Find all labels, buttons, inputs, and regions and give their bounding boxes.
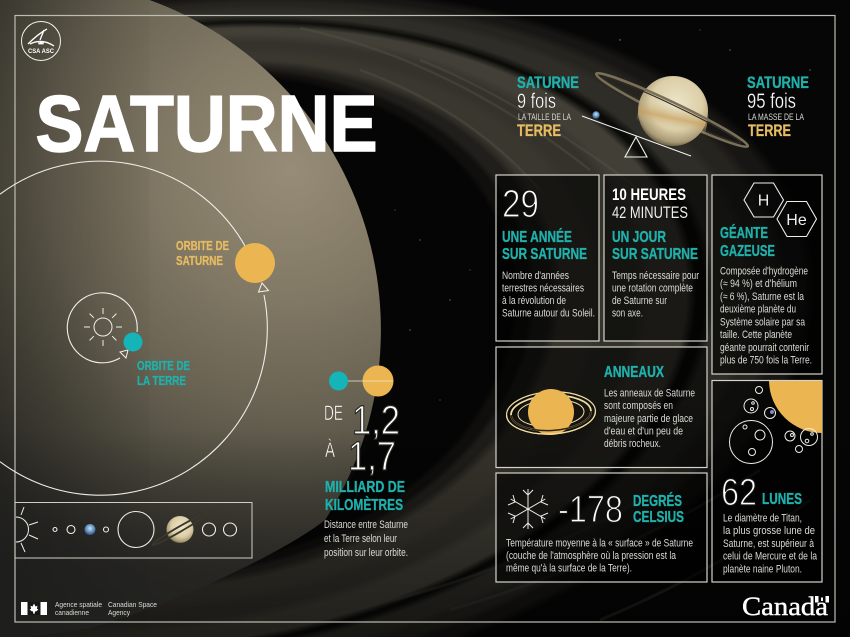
- panel: one year on Saturn: Nombre d'années: [502, 270, 569, 282]
- panel: moons: celui de Mercure et de la: [723, 550, 818, 562]
- panel: gas giant: (≈ 6 %), Saturne est la: [720, 291, 805, 303]
- icon: hydrogen hexagon: H: [758, 192, 769, 210]
- diagram: Saturn orbit: SATURNE: [176, 254, 223, 268]
- diagram: Earth orbit and Sun: [67, 293, 190, 388]
- text: mass comparison: TERRE: [748, 121, 791, 140]
- icon: Saturn quarter disc: [769, 381, 822, 433]
- icon: hydrogen hexagon: [744, 183, 784, 217]
- text: size comparison: LA TAILLE DE LA: [518, 112, 571, 122]
- panel: one day on Saturn: 10 HEURES: [612, 185, 686, 204]
- panel: one year on Saturn: SUR SATURNE: [502, 246, 587, 263]
- background: stars: [394, 30, 811, 400]
- distance between Saturn and Earth: Distance entre Saturne: [324, 519, 408, 531]
- icon: snowflake: [508, 489, 548, 529]
- panel: one year on Saturn: terrestres nécessaires: [502, 282, 584, 294]
- diagram: Saturn orbit: ORBITE DE: [176, 239, 229, 253]
- panel: gas giant: Composée d'hydrogène: [720, 266, 808, 278]
- icon: balance beam: [582, 111, 691, 157]
- icon: helium hexagon: He: [786, 212, 807, 229]
- footer: Canadian Space Agency signature: Agence spatiale: [55, 600, 102, 609]
- balance comparison: Saturn versus Earth: [517, 67, 809, 157]
- logo: Canadian Space Agency: [22, 22, 60, 60]
- icon: moons: [730, 386, 818, 464]
- diagram: Earth orbit and Sun: ORBITE DE: [137, 359, 190, 373]
- panel: temperature: même qu'à la surface de la Terre).: [506, 562, 632, 574]
- distance between Saturn and Earth: 1,2: [352, 397, 400, 443]
- title: SATURNE: [36, 79, 378, 168]
- panel: rings: d'eau et d'un peu de: [604, 426, 683, 438]
- panel: temperature: [496, 473, 707, 582]
- panel: moons: 62: [721, 472, 757, 514]
- footer: Canadian Space Agency signature: canadienne: [55, 608, 89, 617]
- panel: temperature: DEGRÉS: [633, 491, 682, 510]
- background: Saturn planet: [0, 0, 381, 637]
- panel: moons: Le diamètre de Titan,: [723, 512, 802, 524]
- panel: gas giant: GÉANTE: [720, 223, 768, 242]
- panel: one day on Saturn: de Saturne sur: [612, 295, 667, 307]
- panel: gas giant: plus de 750 fois la Terre.: [720, 354, 812, 366]
- panel: moons: planète naine Pluton.: [723, 564, 802, 576]
- footer: Canadian Space Agency signature: [21, 600, 157, 617]
- panel: temperature: (couche de l'atmosphère où la pression est la: [506, 550, 677, 562]
- panel: one day on Saturn: 42 MINUTES: [612, 203, 688, 222]
- panel: gas giant: taille. Cette planète: [720, 329, 792, 341]
- panel: one year on Saturn: Saturne autour du Soleil.: [502, 308, 595, 320]
- panel: rings: Les anneaux de Saturne: [604, 388, 695, 400]
- footer: Canadian Space Agency signature: Agency: [108, 608, 130, 617]
- icon: small Saturn: [151, 511, 209, 547]
- panel: moons: LUNES: [762, 491, 802, 508]
- distance between Saturn and Earth: KILOMÈTRES: [325, 495, 403, 514]
- text: mass comparison: 95 fois: [747, 90, 796, 113]
- panel: gas giant: GAZEUSE: [720, 243, 775, 260]
- icon: helium hexagon: [777, 202, 816, 236]
- panel: one day on Saturn: une rotation complète: [612, 282, 693, 294]
- text: mass comparison: SATURNE: [747, 73, 809, 92]
- panel: one year on Saturn: [496, 175, 599, 341]
- panel: rings: débris rocheux.: [604, 438, 661, 450]
- panel: moons: la plus grosse lune de: [723, 525, 815, 537]
- icon: Saturn with rings: [593, 67, 751, 153]
- distance between Saturn and Earth: À: [325, 439, 335, 462]
- panel: gas giant: [712, 175, 822, 374]
- distance between Saturn and Earth: MILLIARD DE: [325, 479, 405, 496]
- diagram: Earth orbit and Sun: LA TERRE: [137, 374, 186, 388]
- text: size comparison: [517, 73, 579, 140]
- icon: ringed Saturn: [505, 389, 597, 436]
- footer: Canadian Space Agency signature: Canadian Space: [108, 600, 157, 609]
- wordmark: Canada: Canada: [742, 592, 828, 621]
- panel: gas giant: Système solaire par sa: [720, 316, 806, 328]
- panel: one day on Saturn: son axe.: [612, 308, 643, 320]
- icon: sun: [16, 507, 38, 552]
- panel: gas giant: deuxième planète du: [720, 304, 796, 316]
- distance between Saturn and Earth: et la Terre selon leur: [324, 533, 397, 545]
- panel: one year on Saturn: à la révolution de: [502, 295, 566, 307]
- panel: one day on Saturn: [604, 175, 707, 341]
- panel: one day on Saturn: SUR SATURNE: [612, 246, 698, 263]
- text: mass comparison: [747, 73, 809, 140]
- text: size comparison: 9 fois: [517, 90, 556, 113]
- distance between Saturn and Earth: [324, 366, 408, 559]
- panel: temperature: CELSIUS: [633, 509, 684, 526]
- panel: rings: sont composés en: [604, 400, 673, 412]
- panel: one day on Saturn: UN JOUR: [612, 229, 666, 246]
- icon: Earth and Saturn dots: [329, 366, 394, 396]
- panel: moons: Saturne, est supérieur à: [723, 538, 815, 550]
- panel: gas giant: géante pourrait contenir: [720, 342, 809, 354]
- text: mass comparison: LA MASSE DE LA: [748, 112, 804, 122]
- panel: temperature: -178: [558, 489, 623, 531]
- solar system panel: [15, 502, 252, 558]
- panel: rings: ANNEAUX: [604, 364, 665, 381]
- distance between Saturn and Earth: 1,7: [348, 433, 396, 479]
- panel: moons: [712, 380, 822, 582]
- logo: Canadian Space Agency: CSA ASC: [28, 49, 55, 55]
- panel: rings: majeure partie de glace: [604, 413, 693, 425]
- distance between Saturn and Earth: position sur leur orbite.: [324, 547, 408, 559]
- text: size comparison: SATURNE: [517, 73, 579, 92]
- panel: temperature: Température moyenne à la « surface » de Saturne: [506, 538, 693, 550]
- panel: rings: [496, 347, 707, 468]
- panel: one year on Saturn: 29: [502, 183, 539, 226]
- distance between Saturn and Earth: DE: [324, 402, 343, 425]
- panel: gas giant: (≈ 94 %) et d'hélium: [720, 278, 797, 290]
- diagram: Saturn orbit: [0, 161, 275, 495]
- text: size comparison: TERRE: [517, 121, 561, 140]
- panel: one year on Saturn: UNE ANNÉE: [502, 227, 572, 246]
- panel: one day on Saturn: Temps nécessaire pour: [612, 270, 699, 282]
